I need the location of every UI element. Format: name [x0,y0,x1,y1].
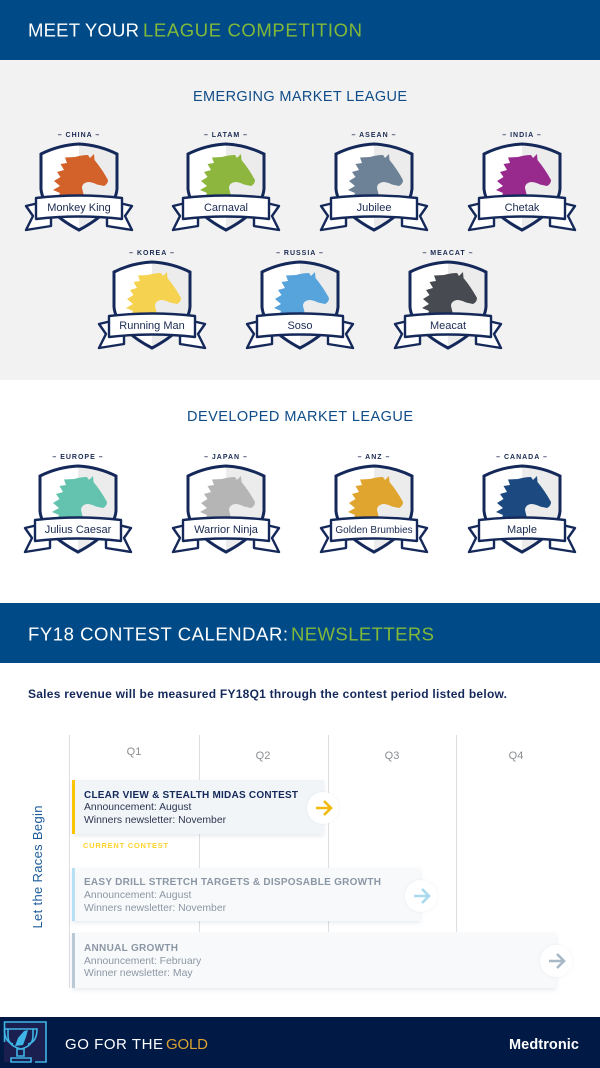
quarter grid lines [70,735,456,988]
badge: Russia, Soso: Soso [287,320,313,332]
icon: grey arrow [540,945,572,977]
badge: India, Chetak [469,132,575,230]
current contest tag: CURRENT CONTEST [83,841,169,850]
contest card: clear view and stealth midas: Announcement: August [84,802,192,813]
badge: Europe, Julius Caesar: Julius Caesar [45,524,112,536]
contest card: annual growth: ANNUAL GROWTH [84,943,178,954]
quarter labels [127,746,523,762]
contest card: clear view and stealth midas: Winners newsletter: November [84,815,227,826]
badge: Asean, Jubilee: Jubilee [357,202,391,214]
badge: China, Monkey King [26,132,132,230]
icon: light blue arrow [405,880,437,912]
calendar chart [30,735,572,988]
quarter labels: Q3 [385,750,399,762]
badge: Canada, Maple: – CANADA – [496,454,548,461]
badge: Korea, Running Man: Running Man [119,320,185,332]
quarter labels: Q1 [127,746,141,758]
contest card: annual growth: Announcement: February [84,956,202,967]
badge: India, Chetak: – INDIA – [502,132,542,139]
badge: Asean, Jubilee [321,132,427,230]
header: contest calendar: NEWSLETTERS [291,624,434,644]
badge: Japan, Warrior Ninja: – JAPAN – [204,454,248,461]
badge: Korea, Running Man [99,250,205,348]
badge: Canada, Maple [469,454,575,552]
panel: developed market league [25,409,575,552]
badge: Japan, Warrior Ninja: Warrior Ninja [194,524,259,536]
intro text: Sales revenue will be measured FY18Q1 through the contest period listed below. [28,687,507,701]
contest card: annual growth [72,933,572,988]
contest card: easy drill and disposable growth: Announcement: August [84,890,192,901]
footer: go for the gold: GO FOR THE [65,1036,163,1053]
badge: China, Monkey King: Monkey King [47,202,111,214]
badge: Russia, Soso [247,250,353,348]
badge: Meacat: – MEACAT – [422,250,474,257]
badge: ANZ, Golden Brumbies: – ANZ – [358,454,390,461]
header: meet your league competition [0,0,600,60]
vertical label: Let the Races Begin [30,806,45,928]
logo: Medtronic: Medtronic [509,1037,579,1053]
icon: trophy [4,1022,46,1062]
badge: China, Monkey King: – CHINA – [58,132,100,139]
icon: yellow arrow [307,792,339,824]
contest card: easy drill and disposable growth: Winners newsletter: November [84,903,227,914]
contest card: easy drill and disposable growth: EASY DRILL STRETCH TARGETS & DISPOSABLE GROWTH [84,877,381,888]
quarter labels: Q4 [509,750,523,762]
footer: go for the gold [0,1017,600,1068]
heading: emerging market league: EMERGING MARKET LEAGUE [193,89,407,105]
header: meet your league competition: LEAGUE COMPETITION [143,20,362,40]
badge: Latam, Carnaval: – LATAM – [204,132,248,139]
contest card: easy drill and disposable growth [72,868,437,921]
quarter labels: Q2 [256,750,270,762]
badge: Europe, Julius Caesar [25,454,131,552]
contest card: annual growth: Winner newsletter: May [84,968,193,979]
header: contest calendar: FY18 CONTEST CALENDAR: [28,624,288,644]
header: contest calendar [0,603,600,663]
panel: emerging market league [0,60,600,380]
heading: developed market league: DEVELOPED MARKET LEAGUE [187,409,413,425]
badge: Meacat: Meacat [430,320,466,332]
badge: ANZ, Golden Brumbies: Golden Brumbies [335,525,413,536]
badge: Europe, Julius Caesar: – EUROPE – [52,454,104,461]
badge: Asean, Jubilee: – ASEAN – [352,132,396,139]
badge: Russia, Soso: – RUSSIA – [276,250,324,257]
contest card: clear view and stealth midas [72,780,339,834]
header: meet your league competition: MEET YOUR [28,20,139,40]
badge: Korea, Running Man: – KOREA – [129,250,175,257]
contest card: clear view and stealth midas: CLEAR VIEW & STEALTH MIDAS CONTEST [84,790,298,801]
badge: ANZ, Golden Brumbies [321,454,427,552]
badge: India, Chetak: Chetak [505,202,540,214]
badge: Meacat [395,250,501,348]
badge: Canada, Maple: Maple [507,524,537,536]
badge: Japan, Warrior Ninja [173,454,279,552]
footer: go for the gold: GOLD [166,1036,208,1053]
badge: Latam, Carnaval: Carnaval [204,202,248,214]
badge: Latam, Carnaval [173,132,279,230]
